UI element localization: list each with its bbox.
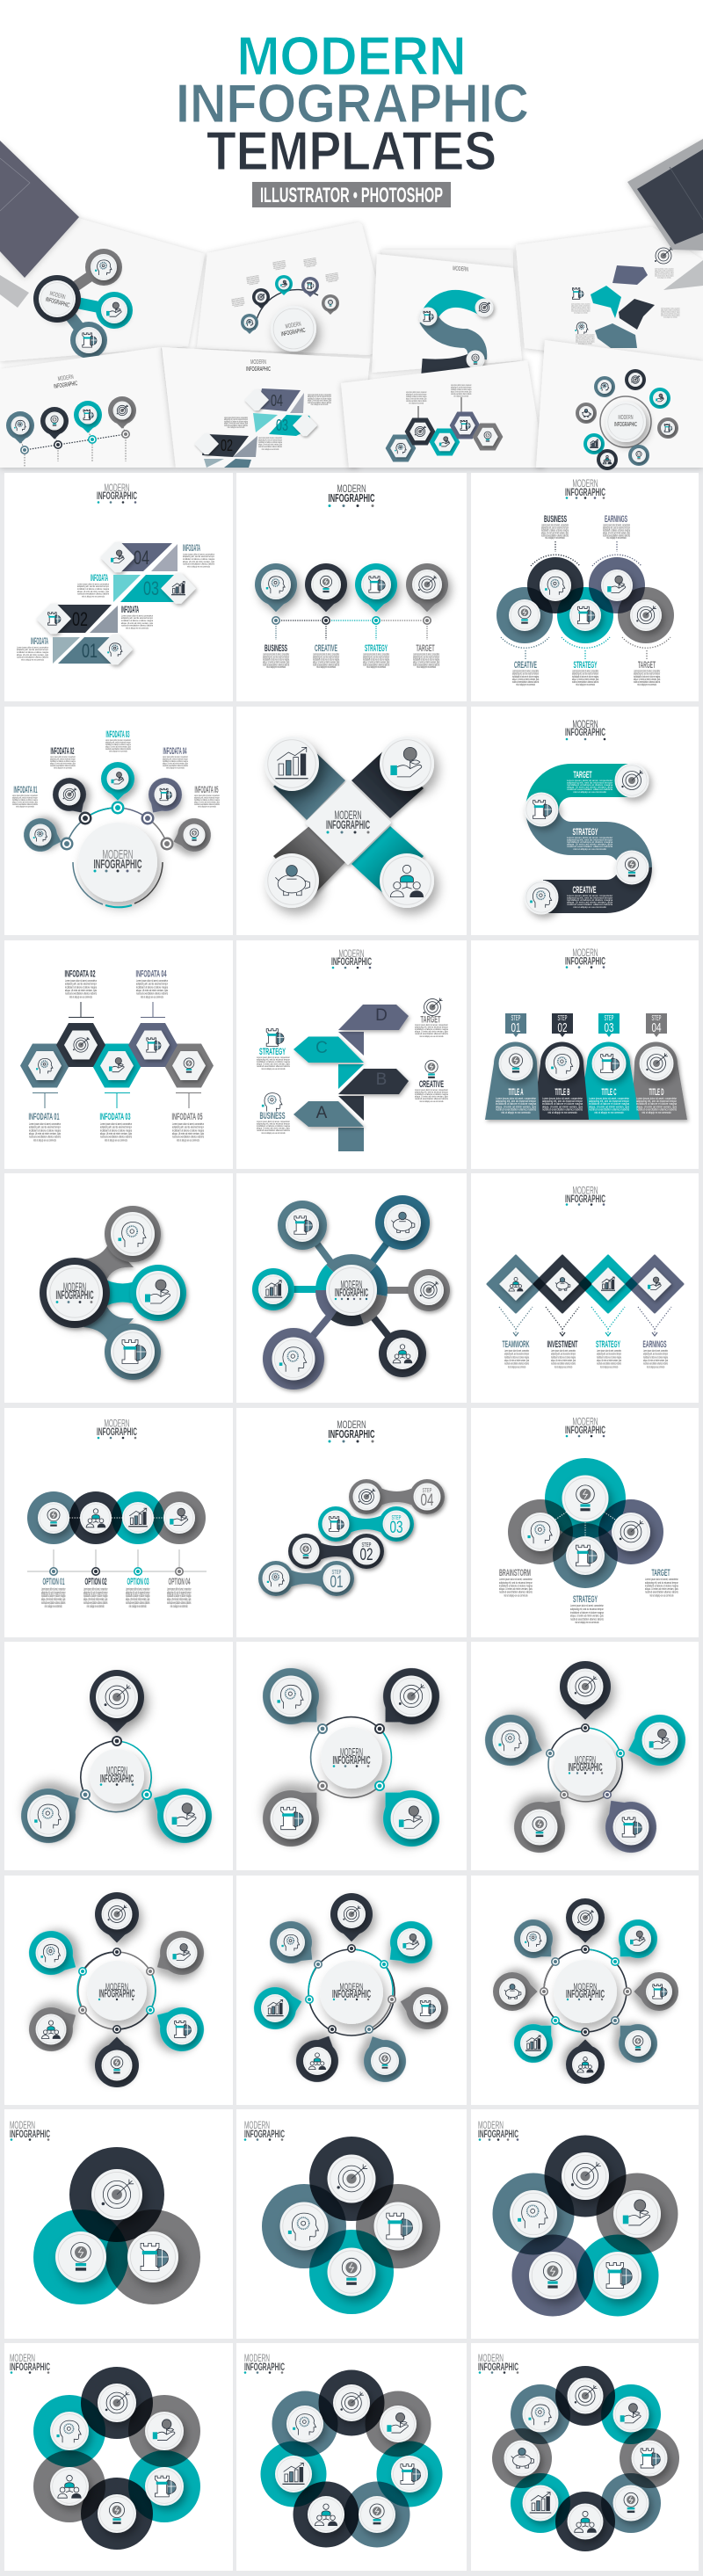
diamond icons — [499, 1267, 671, 1301]
titles and copy: TITLE A — [508, 1087, 524, 1098]
icon: piggy bank — [265, 853, 319, 908]
heading: MODERN — [478, 2119, 504, 2131]
ring — [544, 1949, 627, 2032]
step 02: STEP — [362, 1542, 372, 1549]
labels: OPTION 03 — [127, 1577, 149, 1587]
heading — [478, 2119, 518, 2141]
badge: software names: ILLUSTRATOR • PHOTOSHOP — [260, 184, 443, 207]
ribbon C — [294, 1037, 364, 1089]
mockup sheet: metaball layout — [0, 211, 205, 361]
panel 23: four overlapping circles — [236, 2109, 467, 2339]
center disc: INFOGRAPHIC — [568, 1760, 603, 1774]
center disc: INFOGRAPHIC — [93, 857, 142, 872]
center disc: INFOGRAPHIC — [566, 1987, 605, 2000]
mockup sheet: pins timeline: INFOGRAPHIC — [54, 381, 78, 390]
center disc: MODERN — [573, 1982, 598, 1992]
panel 13: circle row with timeline: OPTION 04 — [169, 1577, 191, 1587]
hero section — [0, 0, 703, 470]
heading — [565, 947, 605, 969]
circles — [260, 2369, 443, 2547]
step tabs: 04 — [652, 1020, 661, 1035]
ribbon D: D — [375, 1006, 388, 1025]
diamonds — [488, 1256, 683, 1312]
badge: software names — [252, 182, 451, 207]
circles — [262, 2137, 440, 2314]
titles and copy: TITLE B — [555, 1087, 570, 1098]
heading: INFOGRAPHIC — [329, 1427, 375, 1440]
side labels and icons: BUSINESS — [260, 1111, 285, 1121]
step tabs — [505, 1013, 667, 1037]
heading: MODERN — [573, 1415, 598, 1427]
hexagon row — [20, 1023, 214, 1088]
pins — [478, 1661, 692, 1863]
ring nodes — [78, 1948, 155, 2034]
panel 4: arc of pins — [4, 707, 233, 935]
labels: CREATIVE — [514, 660, 537, 671]
text blocks: INFODATA — [183, 543, 200, 554]
pins — [493, 1898, 678, 2084]
hero background — [0, 0, 703, 468]
heading: MODERN — [573, 1185, 598, 1197]
labels — [41, 1577, 192, 1608]
mockup sheet: pins timeline — [0, 347, 176, 468]
pins — [250, 1893, 453, 2089]
heading: MODERN — [244, 2352, 270, 2364]
title: TEMPLATES: TEMPLATES — [207, 121, 496, 182]
center disc — [90, 1749, 144, 1803]
panel 6: S path — [471, 707, 699, 935]
tombstone shapes — [485, 1041, 687, 1120]
heading: MODERN — [244, 2119, 270, 2131]
hub ring sectors: INFOGRAPHIC — [335, 1286, 368, 1299]
ring — [308, 1949, 395, 2035]
heading — [565, 1185, 605, 1206]
center disc: INFOGRAPHIC — [100, 1772, 134, 1785]
step 04 — [349, 1479, 445, 1514]
labels: INFODATA 04 — [135, 969, 167, 979]
labels: OPTION 01 — [42, 1577, 65, 1587]
hub — [40, 1258, 110, 1328]
side labels and icons: CREATIVE — [419, 1079, 444, 1090]
satellites — [105, 1206, 186, 1380]
center disc — [554, 1960, 617, 2023]
circle cluster — [496, 557, 674, 643]
heading — [10, 2119, 50, 2141]
labels: INFODATA 05 — [172, 1112, 202, 1122]
connecting arc — [67, 808, 167, 844]
heading — [329, 483, 375, 507]
heading: INFOGRAPHIC — [478, 2128, 518, 2140]
labels: STRATEGY — [573, 1594, 598, 1605]
heading: MODERN — [339, 947, 364, 960]
heading: INFOGRAPHIC — [478, 2361, 518, 2373]
pins — [251, 1657, 451, 1858]
labels — [499, 1568, 678, 1624]
text blocks: INFODATA — [31, 636, 48, 647]
pin: strategy — [355, 563, 397, 625]
labels: TEAMWORK — [503, 1339, 530, 1350]
panel 2: pin timeline — [236, 473, 467, 701]
panel 18: five-node radial — [471, 1642, 699, 1870]
icon: chart — [265, 737, 319, 791]
labels: INFODATA 03 — [100, 1112, 130, 1122]
panel 14: dumbbell steps — [236, 1408, 467, 1637]
step 01: STEP — [332, 1570, 342, 1576]
mockup sheet: hexagon layout — [341, 360, 545, 468]
panel 3: overlapping circles — [471, 473, 699, 701]
panel 4: arc of pins: INFODATA 05 — [195, 785, 218, 795]
heading — [565, 1415, 605, 1437]
mockup sheet: numbered steps layout: INFOGRAPHIC — [246, 366, 271, 373]
panel 5: X shape — [236, 707, 467, 935]
icons — [499, 1046, 673, 1081]
mockup sheet: radial layout — [536, 340, 703, 470]
heading — [331, 947, 372, 969]
circles — [508, 1458, 663, 1588]
labels — [503, 1339, 669, 1369]
center diamond — [306, 781, 390, 864]
mockup sheet: arc layout — [197, 222, 393, 355]
step tabs: STEP — [605, 1014, 613, 1022]
step 04 — [101, 543, 178, 571]
heading — [244, 2352, 285, 2374]
mockup sheet: metaball layout: MODERN — [49, 291, 66, 301]
mockup sheet: arc layout: MODERN — [285, 322, 301, 330]
labels: TARGET — [652, 1568, 670, 1578]
labels — [12, 729, 220, 809]
ribbon A — [294, 1101, 364, 1151]
step 01: 01 — [82, 640, 98, 662]
step 03: STEP — [392, 1515, 402, 1521]
circles — [33, 2367, 200, 2550]
step 04: 04 — [420, 1491, 434, 1510]
panel 27: eight-circle ring — [471, 2343, 699, 2571]
heading: INFOGRAPHIC — [565, 486, 605, 498]
panel 25: six-circle ring — [4, 2343, 233, 2571]
step 01 — [258, 1561, 354, 1596]
bands — [273, 749, 424, 896]
center disc: INFOGRAPHIC — [332, 1753, 371, 1767]
ring nodes — [80, 1736, 152, 1800]
heading — [565, 718, 605, 740]
step 04: STEP — [422, 1488, 432, 1494]
labels: EARNINGS — [643, 1339, 666, 1350]
ring — [311, 1717, 391, 1797]
mockup sheet: numbered steps layout: MODERN — [250, 359, 266, 366]
step tabs: STEP — [511, 1014, 520, 1022]
panel 8: ribbon arrows — [236, 940, 467, 1169]
heading: INFOGRAPHIC — [565, 954, 605, 967]
labels: TARGET — [417, 643, 435, 654]
hub ring sectors — [315, 1254, 388, 1326]
heading: INFOGRAPHIC — [329, 491, 375, 504]
heading — [478, 2352, 518, 2374]
heading — [329, 1419, 375, 1443]
panel 24: five overlapping circles — [471, 2109, 699, 2339]
labels: STRATEGY — [596, 1339, 620, 1350]
pins — [21, 1892, 212, 2087]
heading: MODERN — [573, 477, 598, 490]
labels: BRAINSTORM — [499, 1568, 531, 1578]
pins — [11, 1670, 221, 1853]
icon: team — [380, 853, 434, 908]
step tabs: 03 — [605, 1020, 613, 1035]
band text — [567, 770, 613, 909]
center disc — [554, 1734, 616, 1796]
ribbon D — [338, 1005, 409, 1056]
ring nodes — [546, 1723, 625, 1799]
ring — [77, 1952, 156, 2029]
connectors — [83, 1241, 141, 1345]
text blocks: INFODATA — [121, 605, 139, 615]
labels: INFODATA 01 — [28, 1112, 60, 1122]
heading: MODERN — [10, 2352, 35, 2364]
labels: STRATEGY — [365, 643, 388, 654]
panel 21: eight-node radial — [471, 1876, 699, 2105]
panel 7: hexagons — [4, 940, 233, 1169]
step 01 — [53, 635, 132, 664]
mockup sheet: numbered steps layout — [162, 347, 370, 468]
labels: INFODATA 02 — [65, 969, 95, 979]
labels — [28, 969, 205, 1142]
heading: MODERN — [104, 1417, 130, 1429]
panel 9: steps with tabs — [471, 940, 699, 1169]
labels: BUSINESS — [265, 643, 287, 654]
labels: BUSINESS — [544, 514, 567, 525]
pin: target — [406, 563, 448, 625]
labels: STRATEGY — [573, 660, 598, 671]
heading: INFOGRAPHIC — [565, 1424, 605, 1436]
circles — [492, 2366, 679, 2551]
labels: CREATIVE — [315, 643, 337, 654]
step tabs: 01 — [511, 1020, 520, 1035]
center disc: MODERN — [339, 1982, 364, 1992]
mockup sheet: numbered steps layout: 02 — [221, 437, 233, 454]
band text: TARGET — [573, 770, 592, 780]
hub ring sectors: MODERN — [341, 1278, 362, 1291]
heading — [10, 2352, 50, 2374]
mockup sheet: S-curve layout: MODERN — [453, 265, 468, 273]
pin: creative — [305, 563, 347, 625]
mockup sheet: radial layout: MODERN — [619, 415, 633, 421]
center diamond: MODERN — [334, 808, 362, 822]
S band — [542, 780, 635, 896]
labels: TARGET — [638, 660, 656, 671]
step tabs: 02 — [557, 1020, 568, 1035]
dotted connector — [276, 620, 427, 640]
panel 19: six-node radial — [4, 1876, 233, 2105]
timeline — [27, 1549, 207, 1576]
panel 13: circle row with timeline — [4, 1408, 233, 1637]
mockup sheet: pins timeline: MODERN — [57, 374, 74, 382]
labels: OPTION 02 — [84, 1577, 107, 1587]
step 04: 04 — [134, 547, 149, 569]
panel 16: three-node radial — [4, 1642, 233, 1870]
heading — [97, 482, 137, 504]
titles and copy — [496, 1087, 678, 1114]
circles — [27, 1491, 206, 1544]
step 01: 01 — [330, 1573, 343, 1592]
center disc — [87, 1961, 147, 2021]
mockup sheet: numbered steps layout: 04 — [271, 392, 283, 410]
mockup: left book and ruler — [0, 141, 79, 308]
center disc: MODERN — [340, 1745, 363, 1759]
step 02: 02 — [72, 608, 88, 630]
titles and copy: TITLE D — [649, 1087, 664, 1098]
step 03: 03 — [390, 1519, 402, 1537]
side labels and icons — [257, 998, 448, 1135]
heading: INFOGRAPHIC — [10, 2361, 50, 2373]
center disc — [320, 1961, 383, 2024]
labels: INFODATA 04 — [163, 746, 187, 757]
labels — [512, 514, 661, 686]
side labels and icons: STRATEGY — [259, 1047, 286, 1057]
mockup sheet: metaball layout: INFOGRAPHIC — [45, 297, 70, 309]
dotted arrows — [499, 1307, 671, 1336]
labels: INFODATA 03 — [105, 729, 130, 740]
panel 26: seven-circle ring — [236, 2343, 467, 2571]
ring — [548, 1728, 622, 1802]
heading: MODERN — [104, 482, 130, 494]
labels — [263, 643, 440, 669]
labels: INFODATA 02 — [51, 746, 74, 757]
center disc: INFOGRAPHIC — [332, 1987, 371, 2000]
ribbon C: C — [315, 1039, 328, 1057]
heading: INFOGRAPHIC — [331, 955, 372, 968]
band text: CREATIVE — [573, 885, 596, 896]
icon: plant in hand — [380, 737, 434, 791]
step 02 — [37, 605, 118, 633]
heading — [244, 2119, 285, 2141]
panel 22: three overlapping circles — [4, 2109, 233, 2339]
title: INFOGRAPHIC: INFOGRAPHIC — [176, 74, 529, 134]
labels: INVESTMENT — [547, 1339, 578, 1350]
step 03 — [318, 1506, 414, 1542]
pins — [19, 762, 215, 858]
panel 17: four-node radial — [236, 1642, 467, 1870]
center disc: MODERN — [105, 1982, 128, 1992]
heading: INFOGRAPHIC — [244, 2361, 285, 2373]
dotted arcs — [501, 541, 670, 659]
ring nodes — [540, 1945, 632, 2036]
mockup sheet: S-curve layout — [372, 250, 522, 373]
ring nodes — [305, 1944, 396, 2034]
titles and copy: TITLE C — [601, 1087, 617, 1098]
center diamond: INFOGRAPHIC — [326, 817, 370, 831]
heading — [97, 1417, 137, 1439]
mockup sheet: numbered steps layout: 03 — [276, 417, 288, 434]
center disc: INFOGRAPHIC — [98, 1986, 135, 2000]
step tabs: STEP — [652, 1014, 661, 1022]
heading: MODERN — [337, 1419, 366, 1431]
heading: MODERN — [573, 947, 598, 959]
labels: EARNINGS — [605, 514, 627, 525]
labels: INFODATA 01 — [14, 785, 37, 795]
satellite nodes — [252, 1195, 450, 1390]
step 02: 02 — [360, 1546, 373, 1564]
band text: STRATEGY — [573, 827, 598, 838]
heading: MODERN — [10, 2119, 35, 2131]
ring — [81, 1741, 151, 1812]
spokes — [273, 1223, 429, 1359]
heading: INFOGRAPHIC — [97, 490, 137, 502]
mockup: right book and set square — [627, 139, 703, 290]
circles — [492, 2136, 678, 2317]
heading: MODERN — [478, 2352, 504, 2364]
center disc: MODERN — [575, 1754, 596, 1767]
panel 12: diamonds row — [471, 1173, 699, 1403]
text blocks — [17, 543, 214, 661]
panel 11: hub and spokes — [236, 1173, 467, 1403]
heading: INFOGRAPHIC — [97, 1426, 137, 1438]
circles — [33, 2147, 200, 2304]
heading: MODERN — [573, 718, 598, 730]
ribbon A: A — [316, 1104, 328, 1122]
mockup sheet: arc layout: INFOGRAPHIC — [280, 328, 306, 337]
heading: INFOGRAPHIC — [244, 2128, 285, 2140]
ribbon B: B — [376, 1070, 387, 1089]
heading — [565, 477, 605, 499]
step 03 — [113, 574, 195, 603]
panel 1: numbered parallelograms — [4, 473, 233, 701]
hub: INFOGRAPHIC — [56, 1288, 93, 1302]
center disc — [321, 1727, 382, 1789]
side labels and icons: TARGET — [420, 1014, 441, 1025]
panel 10: metaball cluster — [4, 1173, 233, 1403]
text blocks: INFODATA — [91, 573, 108, 584]
title: MODERN: MODERN — [237, 26, 466, 87]
center disc — [73, 823, 163, 907]
icons on band — [524, 763, 649, 914]
heading: INFOGRAPHIC — [565, 726, 605, 738]
step 03: 03 — [143, 577, 159, 599]
connectors — [33, 1002, 201, 1108]
heading: MODERN — [337, 483, 366, 495]
panel 20: seven-node radial — [236, 1876, 467, 2105]
center disc: MODERN — [102, 847, 134, 862]
step tabs: STEP — [557, 1014, 568, 1022]
heading: INFOGRAPHIC — [565, 1193, 605, 1205]
center disc: MODERN — [106, 1764, 127, 1777]
panel 15: clover circles — [471, 1408, 699, 1637]
ribbon B — [338, 1069, 409, 1121]
mockup sheet: ribbon layout — [516, 227, 703, 369]
step 02 — [288, 1534, 384, 1569]
heading: INFOGRAPHIC — [10, 2128, 50, 2140]
pin: business — [255, 563, 297, 625]
hub: MODERN — [63, 1280, 86, 1294]
mockup sheet: radial layout: INFOGRAPHIC — [614, 422, 637, 428]
ring nodes — [317, 1723, 385, 1791]
